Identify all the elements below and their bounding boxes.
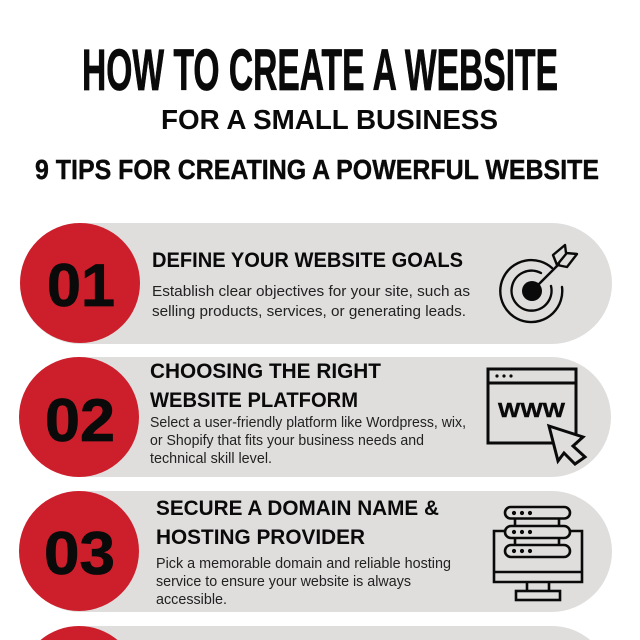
body 03: service to ensure your website is always xyxy=(156,574,411,590)
number badge 01 xyxy=(20,223,140,343)
body 02: or Shopify that fits your business needs and xyxy=(150,433,424,449)
heading 03: HOSTING PROVIDER xyxy=(156,526,365,549)
heading 01: DEFINE YOUR WEBSITE GOALS xyxy=(152,249,463,272)
body 03 xyxy=(156,556,451,608)
number badge 03: 03 xyxy=(44,520,115,587)
body 02 xyxy=(150,415,466,467)
body 01: Establish clear objectives for your site, such as xyxy=(152,284,470,300)
heading 02: WEBSITE PLATFORM xyxy=(150,389,358,412)
heading 03: SECURE A DOMAIN NAME & xyxy=(156,497,439,520)
body 01 xyxy=(152,284,470,320)
icon: browser www with cursor: WWW xyxy=(498,400,565,422)
heading 03 xyxy=(156,497,439,549)
panel: tip 02 xyxy=(19,357,611,477)
number badge 02: 02 xyxy=(45,387,115,454)
subtitle: FOR A SMALL BUSINESS xyxy=(161,104,498,135)
heading 02 xyxy=(150,360,381,412)
icon: servers on monitor xyxy=(494,507,582,600)
icon: browser www with cursor xyxy=(488,369,585,464)
body 01: selling products, services, or generating leads. xyxy=(152,304,466,320)
number badge 02 xyxy=(19,357,139,477)
icon: target with arrow xyxy=(500,245,577,322)
number badge 04 xyxy=(40,626,118,640)
number badge 03 xyxy=(19,491,139,611)
number badge 01: 01 xyxy=(47,252,115,319)
body 03: Pick a memorable domain and reliable hosting xyxy=(156,556,451,572)
body 02: Select a user-friendly platform like Wordpress, wix, xyxy=(150,415,466,431)
heading 02: CHOOSING THE RIGHT xyxy=(150,360,381,383)
panel: tip 01 xyxy=(20,223,612,344)
body 02: technical skill level. xyxy=(150,451,272,467)
panel: tip 03 xyxy=(19,491,612,612)
body 03: accessible. xyxy=(156,592,227,608)
panel: tip 04 (cropped) xyxy=(40,626,590,640)
